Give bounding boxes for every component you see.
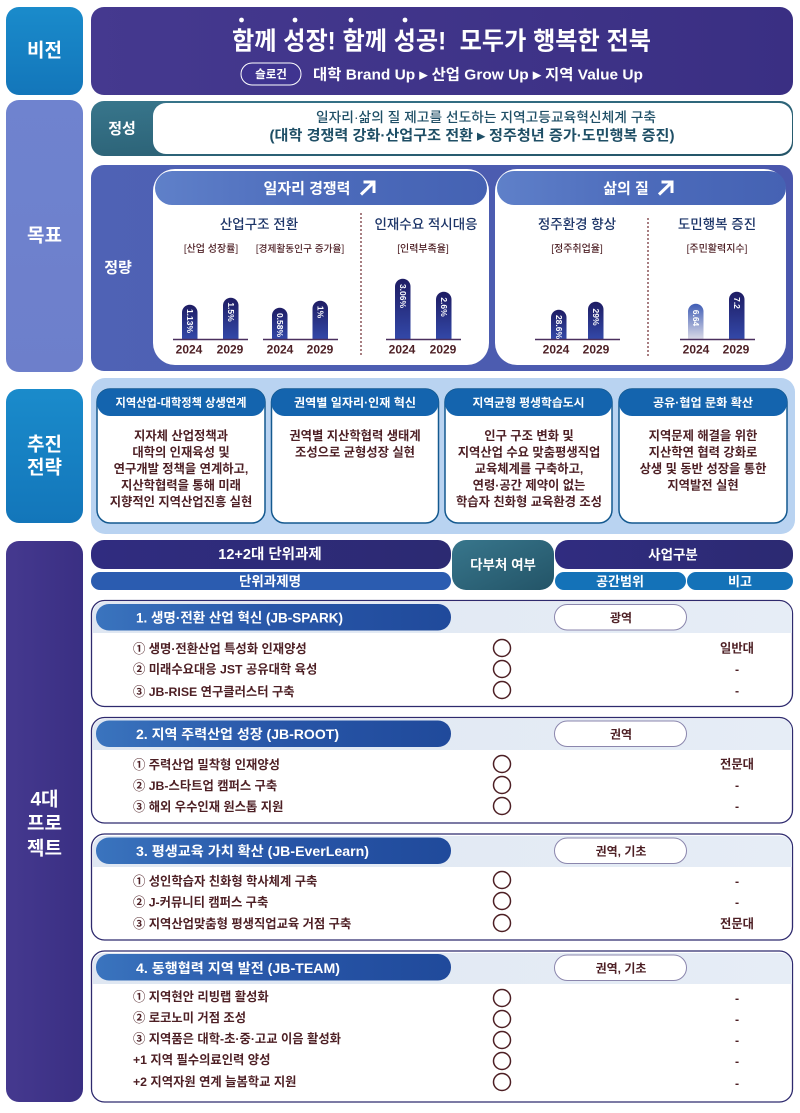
heading: 인재수요 적시대응: 인재수요 적시대응 <box>374 217 478 232</box>
card: 공유·협업 문화 확산: 지산학연 협력 강화로 <box>649 444 757 460</box>
card: 지역균형 평생학습도시: 교육체계를 구축하고, <box>475 462 583 476</box>
bar chart: 경제활동인구 증가율: 1% <box>315 306 325 319</box>
panel: 정량: 정량 <box>104 260 132 276</box>
bar chart: 주민활력지수 <box>680 292 755 356</box>
label: 비전: 비전 <box>27 40 62 62</box>
label: 추진 전략 <box>6 389 83 523</box>
table header: 사업구분 <box>648 548 698 562</box>
heading: 정주환경 향상: 정주환경 향상 <box>538 217 616 232</box>
label: 목표 <box>6 100 83 372</box>
panel: 정성 <box>91 101 793 156</box>
card: 지역균형 평생학습도시: 학습자 친화형 교육환경 조성 <box>456 494 602 509</box>
card: 권역별 일자리·인재 혁신 <box>272 389 438 523</box>
panel: project 4: 권역, 기초 <box>596 960 646 976</box>
bar chart: 경제활동인구 증가율: 0.58% <box>275 313 285 337</box>
bar chart: 주민활력지수: 2024 <box>683 342 710 356</box>
panel: project 4: ① 지역현안 리빙랩 활성화 <box>133 989 269 1004</box>
card: 공유·협업 문화 확산 <box>619 389 787 523</box>
slogan badge: 슬로건 <box>255 67 287 81</box>
label: 정주취업율: [정주취업율] <box>551 242 603 255</box>
title: 함께 성장! 함께 성공! 모두가 행복한 전북 <box>232 28 651 56</box>
card: 지역균형 평생학습도시: 지역균형 평생학습도시 <box>472 396 584 410</box>
card: 지역산업-대학정책 상생연계: 지자체 산업정책과 <box>134 428 228 443</box>
panel: project 1: ③ JB-RISE 연구클러스터 구축 <box>133 685 295 699</box>
qualitative goal text: 일자리·삶의 질 제고를 선도하는 지역고등교육혁신체계 구축 <box>316 110 656 125</box>
panel: project 1: ② 미래수요대응 JST 공유대학 육성 <box>133 662 317 676</box>
heading: 산업구조 전환: 산업구조 전환 <box>220 217 298 232</box>
card: 지역산업-대학정책 상생연계: 지산학협력을 통해 미래 <box>121 478 241 492</box>
bar chart: 경제활동인구 증가율: 2024 <box>267 342 294 356</box>
panel: project 3: - <box>735 874 739 888</box>
table header: 다부처 여부 <box>470 558 536 572</box>
panel: project 3: ② J-커뮤니티 캠퍼스 구축 <box>133 896 268 910</box>
qualitative goal text: (대학 경쟁력 강화·산업구조 전환 ▸ 정주청년 증가·도민행복 증진) <box>270 128 675 144</box>
bar chart: 산업 성장률: 2029 <box>217 342 244 356</box>
panel: project 4: ③ 지역품은 대학-초·중·고교 이음 활성화 <box>133 1031 341 1046</box>
panel: project 4: - <box>735 992 739 1006</box>
panel: project 1: - <box>735 662 739 676</box>
table header: 단위과제명 <box>239 574 301 589</box>
panel: project 2: ① 주력산업 밀착형 인재양성 <box>133 757 280 772</box>
label: 4대 프로젝트: 4대 <box>30 788 59 810</box>
panel: project 4: 4. 동행협력 지역 발전 (JB-TEAM) <box>136 961 340 976</box>
panel: project 2: 2. 지역 주력산업 성장 (JB-ROOT) <box>136 727 339 742</box>
panel: project 4: +1 지역 필수의료인력 양성 <box>133 1053 270 1067</box>
panel: 정성: 정성 <box>108 120 136 138</box>
label: 추진 전략: 전략 <box>27 456 62 478</box>
card: 공유·협업 문화 확산: 지역발전 실현 <box>667 478 739 492</box>
label: 비전 <box>6 7 83 95</box>
card: 지역산업-대학정책 상생연계: 대학의 인재육성 및 <box>132 444 230 460</box>
panel: project 4: - <box>735 1054 739 1068</box>
qualitative goal text <box>270 110 675 144</box>
card: 지역산업-대학정책 상생연계: 연구개발 정책을 연계하고, <box>114 462 248 476</box>
panel: project 3: ① 성인학습자 친화형 학사체계 구축 <box>133 874 317 888</box>
panel: project 3: 3. 평생교육 가치 확산 (JB-EverLearn) <box>136 843 369 859</box>
panel: project 4: ② 로코노미 거점 조성 <box>133 1010 246 1025</box>
panel: project 3: 전문대 <box>720 917 754 931</box>
slogan text: 대학 Brand Up ▸ 산업 Grow Up ▸ 지역 Value Up <box>313 66 643 84</box>
panel: project 3: - <box>735 896 739 910</box>
table header <box>91 540 793 590</box>
table header: 12+2대 단위과제 <box>218 546 322 563</box>
bar chart: 산업 성장률: 2024 <box>176 342 203 356</box>
bar chart: 정주취업율: 29% <box>591 308 601 326</box>
bar chart: 산업 성장률: 1.5% <box>226 302 236 322</box>
panel: project 2 <box>92 718 792 823</box>
label: 목표: 목표 <box>27 226 62 246</box>
panel: vision <box>91 7 793 95</box>
slogan badge <box>241 63 301 85</box>
card: 지역균형 평생학습도시: 연령·공간 제약이 없는 <box>473 478 585 492</box>
card: 권역별 일자리·인재 혁신: 조성으로 균형성장 실현 <box>295 444 415 460</box>
icon: up arrow <box>659 182 672 194</box>
label: 4대 프로젝트: 젝트 <box>27 838 62 860</box>
table header: 비고 <box>728 574 752 589</box>
panel: project 3 <box>92 834 792 940</box>
panel: project 3: ③ 지역산업맞춤형 평생직업교육 거점 구축 <box>133 916 351 931</box>
card: 지역산업-대학정책 상생연계 <box>97 389 265 523</box>
bar chart: 정주취업율: 2024 <box>543 342 570 356</box>
card: 지역산업-대학정책 상생연계: 지향적인 지역산업진흥 실현 <box>110 494 252 509</box>
heading: 도민행복 증진: 도민행복 증진 <box>678 217 756 232</box>
bar chart: 주민활력지수: 2029 <box>723 342 750 356</box>
panel: 삶의 질: 삶의 질 <box>603 180 649 198</box>
panel: project 2: ③ 해외 우수인재 원스톱 지원 <box>133 799 283 814</box>
panel: project 3: 권역, 기초 <box>596 844 646 858</box>
bar chart: 인력부족율: 2029 <box>430 342 457 356</box>
panel: project 4: - <box>735 1012 739 1026</box>
bar chart: 산업 성장률: 1.13% <box>185 309 195 333</box>
card: 공유·협업 문화 확산: 상생 및 동반 성장을 통한 <box>640 461 766 476</box>
card: 지역균형 평생학습도시: 인구 구조 변화 및 <box>484 428 574 443</box>
label: 추진 전략: 추진 <box>27 434 62 456</box>
card: 지역산업-대학정책 상생연계: 지역산업-대학정책 상생연계 <box>116 396 246 410</box>
panel: project 4: - <box>735 1076 739 1090</box>
panel: 일자리 경쟁력: 일자리 경쟁력 <box>264 180 350 198</box>
bar chart: 경제활동인구 증가율: 2029 <box>307 342 334 356</box>
bar chart: 정주취업율 <box>535 302 620 356</box>
panel: project 2: - <box>735 778 739 792</box>
bar chart: 주민활력지수: 6.64 <box>691 310 701 327</box>
panel: project 1: ① 생명·전환산업 특성화 인재양성 <box>133 641 307 656</box>
panel: project 1: - <box>735 684 739 698</box>
bar chart: 인력부족율: 3.06% <box>398 284 408 308</box>
icon: up arrow <box>361 182 374 194</box>
table header: 공간범위 <box>596 574 644 589</box>
panel: project 1 <box>92 600 792 706</box>
card: 공유·협업 문화 확산: 공유·협업 문화 확산 <box>653 396 753 410</box>
bar chart: 산업 성장률 <box>173 298 248 356</box>
label: 인력부족율: [인력부족율] <box>397 242 449 255</box>
bar chart: 인력부족율 <box>386 279 461 356</box>
bar chart: 인력부족율: 2024 <box>389 342 416 356</box>
card: 권역별 일자리·인재 혁신: 권역별 지산학협력 생태계 <box>289 428 421 443</box>
card: 지역균형 평생학습도시: 지역산업 수요 맞춤평생직업 <box>458 446 600 460</box>
panel: project 1: 일반대 <box>720 642 754 656</box>
panel: project 4: +2 지역자원 연계 늘봄학교 지원 <box>133 1074 296 1089</box>
card: 지역균형 평생학습도시 <box>445 389 612 523</box>
bar chart: 인력부족율: 2.6% <box>439 297 449 317</box>
bar chart: 정주취업율: 2029 <box>583 342 610 356</box>
card: 권역별 일자리·인재 혁신: 권역별 일자리·인재 혁신 <box>294 396 416 410</box>
panel: 일자리 경쟁력 <box>153 169 489 365</box>
label: 경제활동인구 증가율: [경제활동인구 증가율] <box>256 242 344 255</box>
panel: project 4 <box>92 951 792 1102</box>
bar chart: 정주취업율: 28.6% <box>554 315 564 339</box>
panel: project 2: 전문대 <box>720 758 754 772</box>
bar chart: 주민활력지수: 7.2 <box>732 297 742 309</box>
panel: project 2: ② JB-스타트업 캠퍼스 구축 <box>133 779 277 793</box>
panel: 삶의 질 <box>495 169 786 365</box>
label: 주민활력지수: [주민활력지수] <box>687 242 748 255</box>
panel: project 2: - <box>735 800 739 814</box>
panel: 정량 <box>91 165 793 371</box>
label: 산업 성장률: [산업 성장률] <box>184 242 238 255</box>
label: 4대 프로젝트 <box>6 541 83 1102</box>
panel: project 1: 1. 생명·전환 산업 혁신 (JB-SPARK) <box>136 610 343 626</box>
panel: project 2: 권역 <box>610 728 632 742</box>
label: 4대 프로젝트: 프로 <box>27 814 62 834</box>
bar chart: 경제활동인구 증가율 <box>263 301 338 356</box>
panel: strategies <box>91 378 795 534</box>
card: 공유·협업 문화 확산: 지역문제 해결을 위한 <box>649 428 757 443</box>
panel: project 4: - <box>735 1034 739 1048</box>
panel: project 1: 광역 <box>610 611 632 625</box>
